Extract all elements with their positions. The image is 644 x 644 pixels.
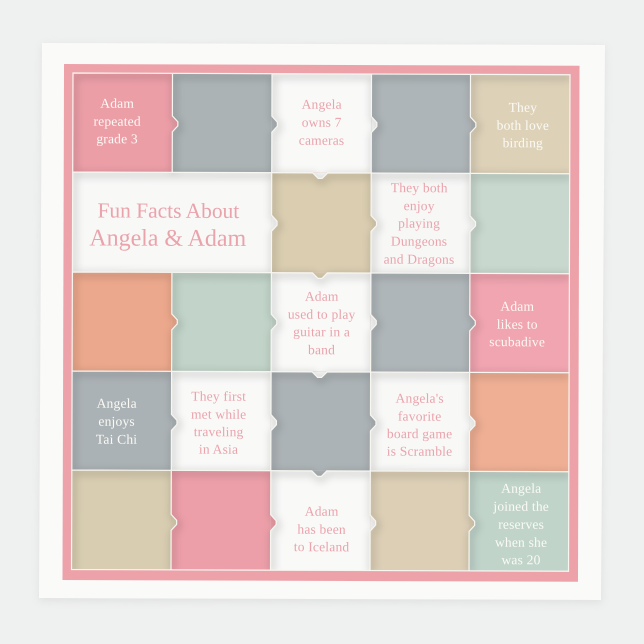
cell: green blank r2c5 [470,173,570,274]
text: Angela's favorite board game is Scramble: board game [387,426,452,441]
text: They first met while traveling in Asia: They first [191,389,246,404]
cell: tan blank r2c3 [271,173,371,273]
text: Adam has been to Iceland: has been [297,522,346,537]
pink border frame [62,64,580,582]
text: Angela owns 7 cameras: Angela [302,97,342,112]
cell: Angela enjoys Tai Chi [72,371,172,470]
text: Adam used to play guitar in a band: guitar in a [293,324,350,339]
title panel [72,172,272,273]
text: Angela owns 7 cameras: owns 7 [302,115,342,130]
text: They first met while traveling in Asia: traveling [194,424,244,439]
cell: gray blank r1c4 [371,74,470,173]
cell: Angela owns 7 cameras [272,74,372,173]
text: Adam repeated grade 3 [93,96,141,146]
text: Angela enjoys Tai Chi: enjoys [98,414,135,429]
text: Angela joined the reserves when she was 20: Angela [501,481,541,496]
cell: tan blank r5c4 [370,471,469,571]
text: Adam repeated grade 3: grade 3 [96,131,138,146]
text: Adam repeated grade 3: repeated [93,114,141,129]
text: They first met while traveling in Asia: in Asia [199,442,238,457]
text: Angela joined the reserves when she was 20: when she [495,535,547,550]
text: They first met while traveling in Asia: met while [191,407,246,422]
title text [89,198,247,252]
text: They both love birding: birding [503,135,543,150]
text: Angela owns 7 cameras: cameras [299,133,344,148]
tabs: green [271,314,277,330]
cell: gray blank r1c2 [172,73,272,173]
text: They both enjoy playing Dungeons and Dragons: Dungeons [391,234,447,249]
text: Adam likes to scubadive: Adam [500,299,535,314]
tabs: gray [171,116,476,477]
text: Angela enjoys Tai Chi: Angela [97,396,137,411]
napkin shadow [39,45,605,603]
text: Angela joined the reserves when she was 20: was 20 [501,552,541,567]
cell: Adam repeated grade 3 [73,73,172,172]
text: Adam repeated grade 3: Adam [100,96,134,111]
text: Angela's favorite board game is Scramble: Angela's [396,391,444,406]
text: Adam used to play guitar in a band: used to play [288,307,356,322]
text: They both enjoy playing Dungeons and Dragons: playing [398,216,440,231]
cell: orange blank r4c5 [469,372,569,472]
cell: They both love birding [470,74,570,174]
text: Adam used to play guitar in a band [288,289,356,357]
title line 1: Fun Facts About [97,198,240,223]
text: Adam likes to scubadive [489,299,545,349]
text: Angela enjoys Tai Chi [96,396,137,447]
cell: Angela joined the reserves when she was 20 [469,471,569,571]
tabs: orange [172,314,177,330]
text: Adam likes to scubadive: likes to [497,317,538,332]
text: They both enjoy playing Dungeons and Dragons: enjoy [404,198,435,213]
cell: tan blank r5c1 [72,470,171,570]
quilt panel [62,64,580,582]
cell: They both enjoy playing Dungeons and Dragons [371,173,470,273]
text: They first met while traveling in Asia [191,389,246,457]
cell: gray blank r3c4 [371,273,470,372]
text: Adam used to play guitar in a band: Adam [305,289,339,304]
text: Angela enjoys Tai Chi: Tai Chi [96,432,137,447]
text: They both enjoy playing Dungeons and Dragons: They both [391,180,448,195]
cell: Angela's favorite board game is Scramble [370,372,470,471]
title line 2: Angela & Adam [89,225,247,252]
text: They both enjoy playing Dungeons and Dragons: and Dragons [384,252,454,267]
napkin sheet [39,43,605,600]
text: Adam has been to Iceland: Adam [305,504,339,519]
cell: green blank r3c2 [172,272,271,372]
cell: Adam likes to scubadive [470,273,569,373]
text: Angela's favorite board game is Scramble [387,391,453,459]
text: Angela joined the reserves when she was 20: joined the [492,499,549,514]
tabs: tan [171,215,476,531]
cell: Adam used to play guitar in a band [271,273,371,372]
text: Adam has been to Iceland [294,504,350,554]
text: Adam has been to Iceland: to Iceland [294,539,349,554]
tabs: white [271,116,476,531]
cell: pink blank r5c2 [171,470,271,570]
cell: They first met while traveling in Asia [171,371,271,471]
text: Adam used to play guitar in a band: band [308,342,335,357]
cell: orange blank r3c1 [72,272,172,371]
white grid lines [72,73,570,571]
cell: Adam has been to Iceland [271,471,370,571]
text: Angela joined the reserves when she was 20 [492,481,549,567]
text: Angela's favorite board game is Scramble: favorite [398,409,441,424]
text: They both enjoy playing Dungeons and Dragons [384,180,455,267]
text: They both love birding: both love [497,118,549,133]
text: Angela joined the reserves when she was 20: reserves [498,517,544,532]
paper fold shadows [73,76,571,574]
tabs: pink [171,116,277,531]
cell: gray blank r4c3 [271,372,371,471]
text: They both love birding: They [509,100,537,115]
text: Angela owns 7 cameras [299,97,345,148]
text: Adam likes to scubadive: scubadive [489,334,545,349]
text: They both love birding [497,100,549,150]
text: Angela's favorite board game is Scramble: is Scramble [387,444,452,459]
